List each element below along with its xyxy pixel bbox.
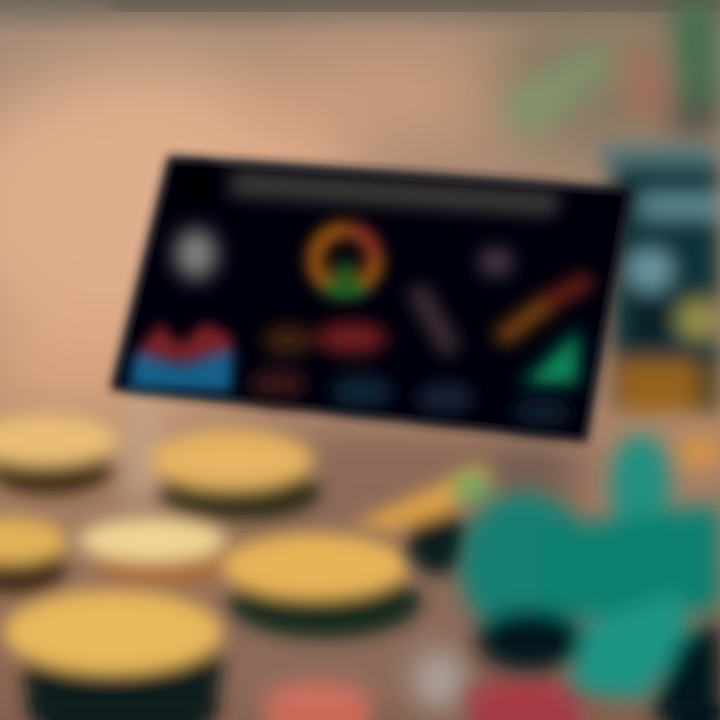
chart: grey-purple scatter: [415, 246, 514, 414]
icon: top-left tile: [182, 166, 214, 202]
table surface: [130, 405, 600, 715]
chart: red bars: [248, 321, 394, 408]
slice: centre: [221, 533, 421, 638]
chart: blue and red area: [128, 322, 234, 393]
slice: top middle: [150, 430, 320, 519]
background plant: [495, 0, 720, 140]
slice: middle pale: [78, 518, 226, 585]
right side jar stack: [600, 146, 720, 470]
chart: green triangle: [520, 328, 580, 385]
chart: orange and red line: [505, 282, 585, 335]
slice: dark bottom edge: [40, 696, 205, 720]
grey glass highlight: [414, 650, 466, 710]
slice: middle left: [0, 518, 68, 593]
slice: top left: [0, 414, 119, 494]
teal object, lower right: [454, 435, 720, 720]
teal object: dark bottom edge: [670, 696, 720, 720]
background: dark top edge: [110, 0, 720, 8]
icon: pale gauge: [174, 228, 218, 280]
food slices: [0, 414, 490, 720]
slice: front left: [3, 590, 223, 720]
red fruit at bottom: [263, 680, 585, 720]
card body: [113, 158, 630, 440]
card title bar: [228, 170, 560, 216]
chart: donut: [315, 230, 375, 292]
dashboard card: [113, 158, 630, 440]
slice: back right: [350, 465, 490, 574]
card lower label block: [512, 397, 572, 427]
